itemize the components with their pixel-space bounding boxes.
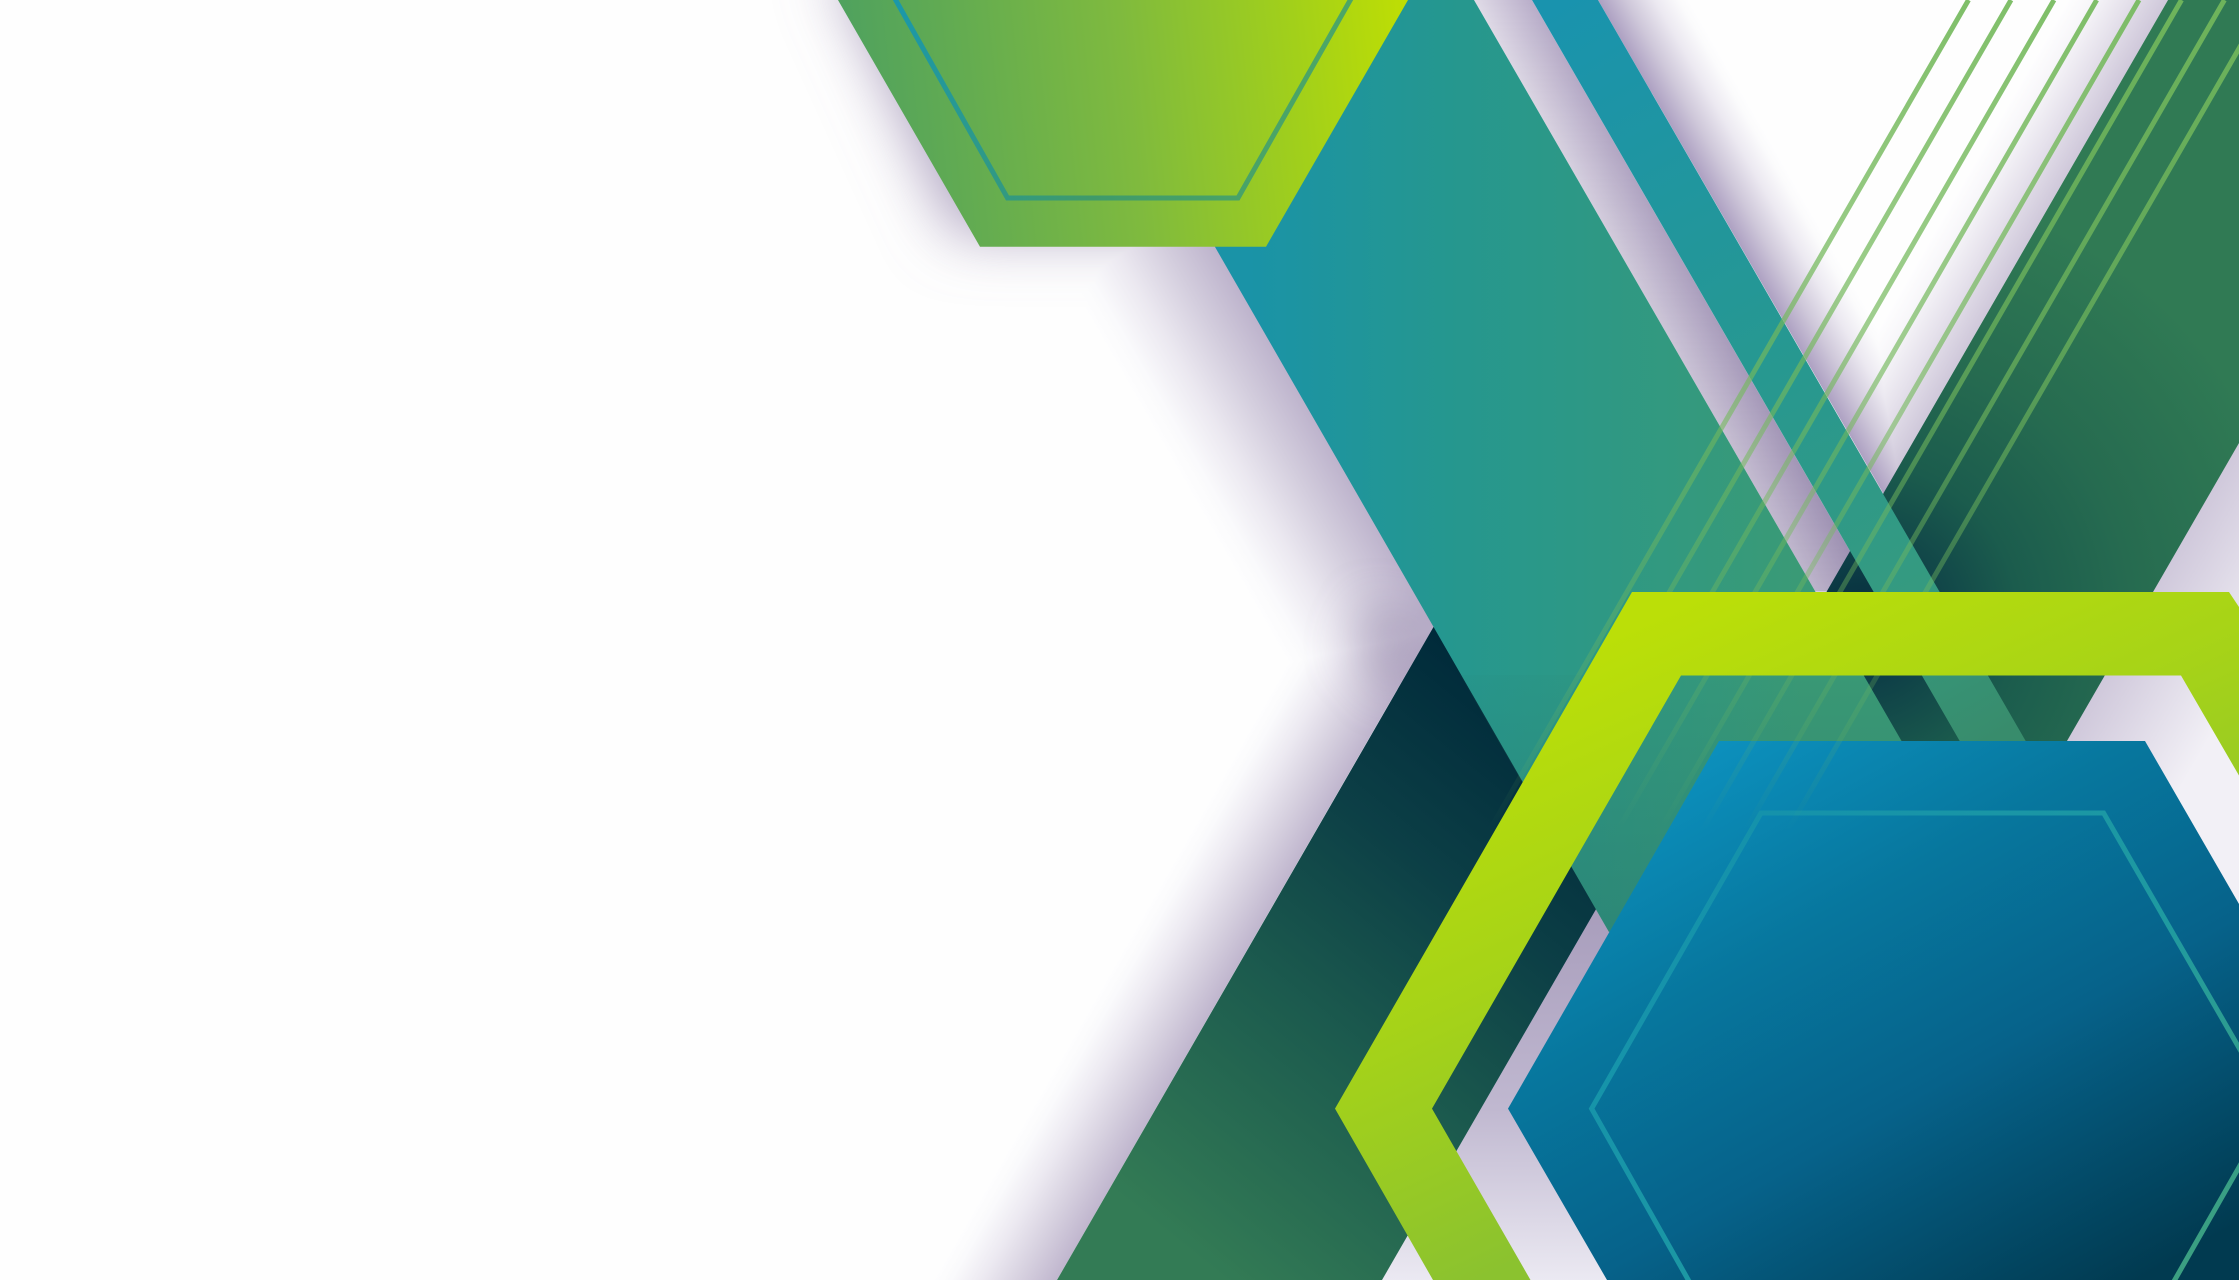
blue hexagon inner outline: [1592, 813, 2239, 1280]
top green hexagon: [838, 0, 1408, 247]
thin diagonal green lines: [1490, 0, 2239, 830]
drop shadows on white field: [830, 0, 2239, 1280]
top hexagon inner outline: [894, 0, 1352, 198]
dark green band, upper right: [1730, 0, 2239, 760]
lime chevron frame: [1335, 592, 2239, 1280]
teal main band: [1073, 0, 1905, 932]
blue hexagon: [1508, 741, 2239, 1280]
dark green band, lower left: [1057, 600, 1640, 1280]
teal narrow stripe: [1532, 0, 2028, 745]
